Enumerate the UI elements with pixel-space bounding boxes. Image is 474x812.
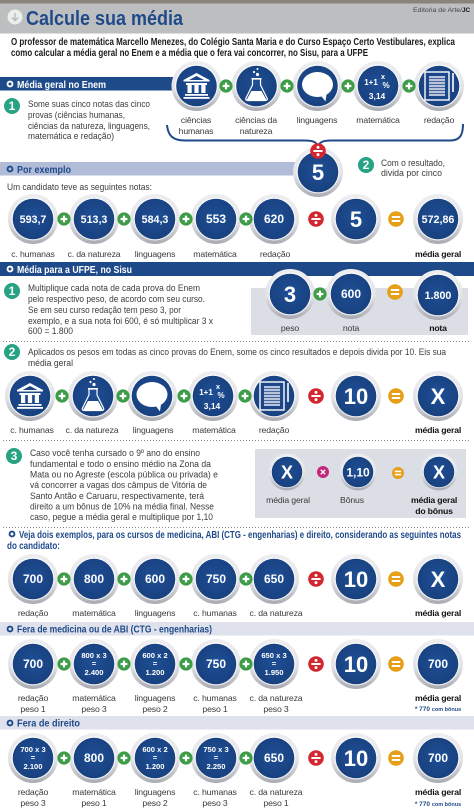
row: example scores: 584,3: [142, 214, 168, 226]
labels: law calculation: peso 2: [142, 798, 168, 808]
row: example scores: 572,86: [422, 214, 454, 226]
circle: divide by 5: 5: [312, 160, 324, 185]
labels: medicine calculation: peso 3: [81, 704, 107, 714]
labels: icons formula: linguagens: [133, 425, 174, 435]
labels: medicine calculation: média geral: [415, 693, 461, 703]
labels: candidate scores: matemática: [72, 608, 116, 618]
labels: icons formula: c. da natureza: [66, 425, 119, 435]
labels: subjects: ciências da: [235, 115, 277, 125]
step 2 badge: [4, 344, 20, 360]
row: medicine calculation: 1.200: [145, 668, 165, 677]
labels: medicine calculation: matemática: [72, 693, 116, 703]
row: icons formula: %: [217, 391, 225, 400]
row: medicine calculation: =: [153, 659, 158, 668]
row: medicine calculation: 10: [344, 652, 368, 677]
step 3 badge: 3: [11, 449, 18, 463]
labels: icons formula: média geral: [415, 425, 461, 435]
step 1 text: Some suas cinco notas das cinco: [28, 99, 150, 110]
row: medicine calculation: 750: [206, 657, 226, 671]
step 3 badge: [6, 448, 22, 464]
panel: bonus: média geral: [411, 495, 457, 505]
circle: divide by 5: [293, 143, 343, 197]
row: medicine calculation: 600 x 2: [142, 651, 168, 660]
icon: ciências da natureza: [232, 61, 282, 111]
labels: example scores: matemática: [193, 249, 237, 259]
row: icons formula: X: [431, 384, 446, 409]
step 3 text: direito a um bônus de 10% na média final. Nesse: [30, 502, 214, 512]
panel: weight example: peso: [281, 323, 299, 333]
icon: linguagens: [292, 61, 342, 111]
step 1 badge: 1: [9, 284, 16, 298]
labels: subjects: linguagens: [297, 115, 338, 125]
labels: subjects: matemática: [356, 115, 400, 125]
row: candidate scores: 10: [344, 567, 368, 592]
step 2 text: divida por cinco: [381, 168, 442, 179]
labels: example scores: média geral: [415, 249, 461, 259]
step 2 text: [28, 347, 447, 369]
row: example scores: 620: [264, 212, 284, 226]
icon: matemática: 1+1: [364, 78, 378, 87]
row: icons formula: x: [216, 382, 221, 391]
labels: law calculation: peso 1: [81, 798, 107, 808]
row: medicine calculation: 800 x 3: [81, 651, 107, 660]
section bar: Média geral no Enem: Média geral no Enem: [17, 79, 106, 91]
labels: medicine calculation: c. da natureza: [250, 693, 303, 703]
section bar: Fera de direito: Fera de direito: [17, 718, 80, 730]
section bar: Por exemplo: [0, 162, 300, 176]
row: medicine calculation: 650 x 3: [261, 651, 287, 660]
row: candidate scores: 700: [23, 572, 43, 586]
labels: candidate scores: [18, 608, 461, 618]
labels: candidate scores: c. humanas: [193, 608, 238, 618]
title: Calcule sua média: [26, 7, 184, 30]
labels: medicine calculation: redação: [18, 693, 48, 703]
section bar: Fera de direito: [0, 716, 474, 730]
labels: law calculation: matemática: [72, 787, 116, 797]
step 1 badge: 1: [9, 99, 16, 113]
row: law calculation: 1.200: [145, 762, 165, 771]
labels: law calculation: c. da natureza: [250, 787, 303, 797]
panel: bonus: Bônus: [340, 495, 365, 505]
panel: weight example: 600: [341, 287, 361, 301]
step 2 badge: 2: [363, 158, 370, 172]
labels: candidate scores: c. da natureza: [250, 608, 303, 618]
step 3 text: Caso você tenha cursado o 9º ano do ensino: [30, 448, 200, 459]
labels: medicine calculation: [18, 693, 461, 714]
step 3 text: vá concorrer a vagas dos câmpus de Vitória de: [30, 480, 207, 491]
labels: law calculation: peso 3: [20, 798, 46, 808]
step 1 text: provas (ciências humanas,: [28, 110, 125, 121]
row: candidate scores: 800: [84, 572, 104, 586]
labels: icons formula: redação: [259, 425, 289, 435]
step 2 text: média geral: [28, 358, 73, 369]
row: five subject icons: [172, 61, 464, 111]
plus signs: [219, 79, 416, 93]
labels: icons formula: c. humanas: [10, 425, 55, 435]
labels: icons formula: [10, 425, 461, 435]
step 1 text: ciências da natureza, linguagens,: [28, 121, 150, 132]
section bar: Fera de medicina: Fera de medicina ou de ABI (CTG - engenharias): [17, 624, 212, 636]
labels: law calculation: redação: [18, 787, 48, 797]
labels: example scores: c. humanas: [11, 249, 56, 259]
row: icons formula: 10: [344, 384, 368, 409]
step 3 text: Mata ou no Agreste (escola pública ou privada) e: [30, 470, 218, 480]
row: example scores: 5: [350, 207, 362, 232]
step 1 badge: [4, 98, 20, 114]
labels: medicine calculation: peso 3: [263, 704, 289, 714]
section bar: Por exemplo: Por exemplo: [17, 164, 71, 176]
row: medicine calculation: 700: [428, 657, 448, 671]
labels: law calculation: * 770 com bônus: [415, 801, 461, 808]
row: medicine calculation: =: [92, 659, 97, 668]
step 1 text: [28, 99, 150, 142]
labels: example scores: redação: [260, 249, 290, 259]
row: law calculation: 700 x 3: [20, 745, 46, 754]
heading: two examples: [7, 530, 461, 552]
row: medicine calculation: 1.950: [264, 668, 284, 677]
labels: candidate scores: média geral: [415, 608, 461, 618]
labels: candidate scores: redação: [18, 608, 48, 618]
icon: ciências humanas: [172, 61, 222, 111]
row: candidate scores: 750: [206, 572, 226, 586]
panel: weight example: nota: [429, 323, 447, 333]
row: law calculation: 700: [428, 751, 448, 765]
labels: example scores: [11, 249, 461, 259]
step 3 text: fundamental e todo o ensino médio na Zona da: [30, 459, 212, 470]
labels: subjects: ciências: [181, 115, 212, 125]
labels: law calculation: peso 3: [202, 798, 228, 808]
icon: matemática: x: [381, 72, 386, 81]
heading: two examples: do candidato:: [7, 541, 60, 552]
step 1 badge: [4, 283, 20, 299]
labels: medicine calculation: * 770 com bônus: [415, 706, 461, 713]
labels: law calculation: c. humanas: [193, 787, 238, 797]
row: law calculation: 650: [264, 751, 284, 765]
icon: matemática: 3,14: [369, 91, 386, 101]
section bar: Média para a UFPE: Média para a UFPE, no Sisu: [17, 264, 132, 276]
labels: medicine calculation: linguagens: [135, 693, 176, 703]
step 1 text: matemática e redação): [28, 131, 114, 142]
row: law calculation: 2.100: [23, 762, 43, 771]
labels: medicine calculation: peso 1: [20, 704, 46, 714]
text: candidate notes: Um candidato teve as seguintes notas:: [7, 182, 152, 193]
step 3 text: Santo Antão e Caruaru, respectivamente, terá: [30, 491, 205, 502]
panel: weight example: 3: [284, 282, 296, 307]
icon: redação: [414, 61, 464, 111]
row: example scores: 513,3: [81, 214, 107, 226]
panel: bonus: média geral: [266, 495, 310, 505]
labels: medicine calculation: c. humanas: [193, 693, 238, 703]
section bar: Fera de medicina: [0, 622, 474, 636]
icon: header arrow: [8, 10, 22, 24]
labels: subjects: redação: [424, 115, 454, 125]
step 1 text: pelo respectivo peso, de acordo com seu curso.: [28, 294, 205, 305]
panel: weight example: nota: [343, 323, 359, 333]
row: icons formula: 3,14: [204, 401, 221, 411]
step 1 text: [28, 283, 213, 337]
icon: matemática: [353, 61, 403, 111]
section bar: Média geral no Enem: [0, 77, 175, 91]
panel: bonus: 1,10: [346, 466, 370, 480]
row: icons formula: 1+1: [199, 388, 213, 397]
step 2 badge: 2: [9, 345, 16, 359]
row: candidate scores: 600: [145, 572, 165, 586]
labels: law calculation: [18, 787, 461, 808]
row: law calculation: =: [153, 753, 158, 762]
step 1 text: exemplo, e a sua nota foi 600, é só multiplicar 3 x: [28, 316, 213, 327]
labels: example scores: linguagens: [135, 249, 176, 259]
row: law calculation: 2.250: [206, 762, 226, 771]
panel: bonus: do bônus: [415, 506, 453, 516]
row: law calculation: [8, 733, 463, 783]
row: law calculation: =: [31, 753, 36, 762]
step 2 text: Com o resultado,: [381, 158, 445, 169]
row: law calculation: 750 x 3: [203, 745, 229, 754]
step 2 badge: [358, 157, 374, 173]
intro text: [11, 37, 455, 59]
row: example scores: [8, 194, 463, 244]
panel: bonus: [255, 449, 466, 518]
brace: [167, 124, 463, 146]
row: law calculation: 10: [344, 746, 368, 771]
section bar: Média para a UFPE: [0, 262, 474, 276]
row: law calculation: 800: [84, 751, 104, 765]
labels: medicine calculation: peso 2: [142, 704, 168, 714]
row: icons formula: [5, 371, 463, 421]
row: candidate scores: X: [431, 567, 446, 592]
step 1 text: Se em seu curso redação tem peso 3, por: [28, 305, 182, 316]
step 1 text: 600 = 1.800: [28, 326, 73, 337]
labels: subjects: humanas: [179, 126, 214, 136]
labels: icons formula: matemática: [192, 425, 236, 435]
icon: matemática: %: [382, 81, 390, 90]
labels: subjects: natureza: [240, 126, 273, 136]
panel: bonus: X: [281, 462, 293, 482]
header band: [0, 0, 474, 34]
labels: law calculation: média geral: [415, 787, 461, 797]
row: medicine calculation: 700: [23, 657, 43, 671]
credit: Editoria de Arte/: [413, 7, 462, 14]
panel: bonus: X: [433, 462, 445, 482]
labels: subjects: [179, 115, 454, 136]
row: example scores: 553: [206, 212, 226, 226]
credit: JC: [462, 7, 471, 14]
row: law calculation: =: [214, 753, 219, 762]
row: candidate scores: [8, 554, 463, 604]
labels: example scores: c. da natureza: [68, 249, 121, 259]
labels: candidate scores: linguagens: [135, 608, 176, 618]
step 1 text: Multiplique cada nota de cada prova do Enem: [28, 283, 200, 294]
panel: weight example: 1.800: [425, 290, 451, 302]
row: candidate scores: 650: [264, 572, 284, 586]
panel: weight example: [251, 269, 468, 335]
labels: law calculation: peso 1: [263, 798, 289, 808]
row: medicine calculation: 2.400: [84, 668, 104, 677]
row: example scores: 593,7: [20, 214, 46, 226]
row: medicine calculation: =: [272, 659, 277, 668]
row: medicine calculation: [8, 639, 463, 689]
labels: medicine calculation: peso 1: [202, 704, 228, 714]
step 2 text: [381, 158, 445, 179]
step 3 text: caso, pegue a média geral e multiplique por 1,10: [30, 512, 213, 523]
row: law calculation: 600 x 2: [142, 745, 168, 754]
labels: law calculation: linguagens: [135, 787, 176, 797]
step 3 text: [30, 448, 218, 523]
intro text: como calcular a média geral no Enem e a média que o fera vai concorrer, no Sisu, para a UFPE: [11, 48, 368, 59]
